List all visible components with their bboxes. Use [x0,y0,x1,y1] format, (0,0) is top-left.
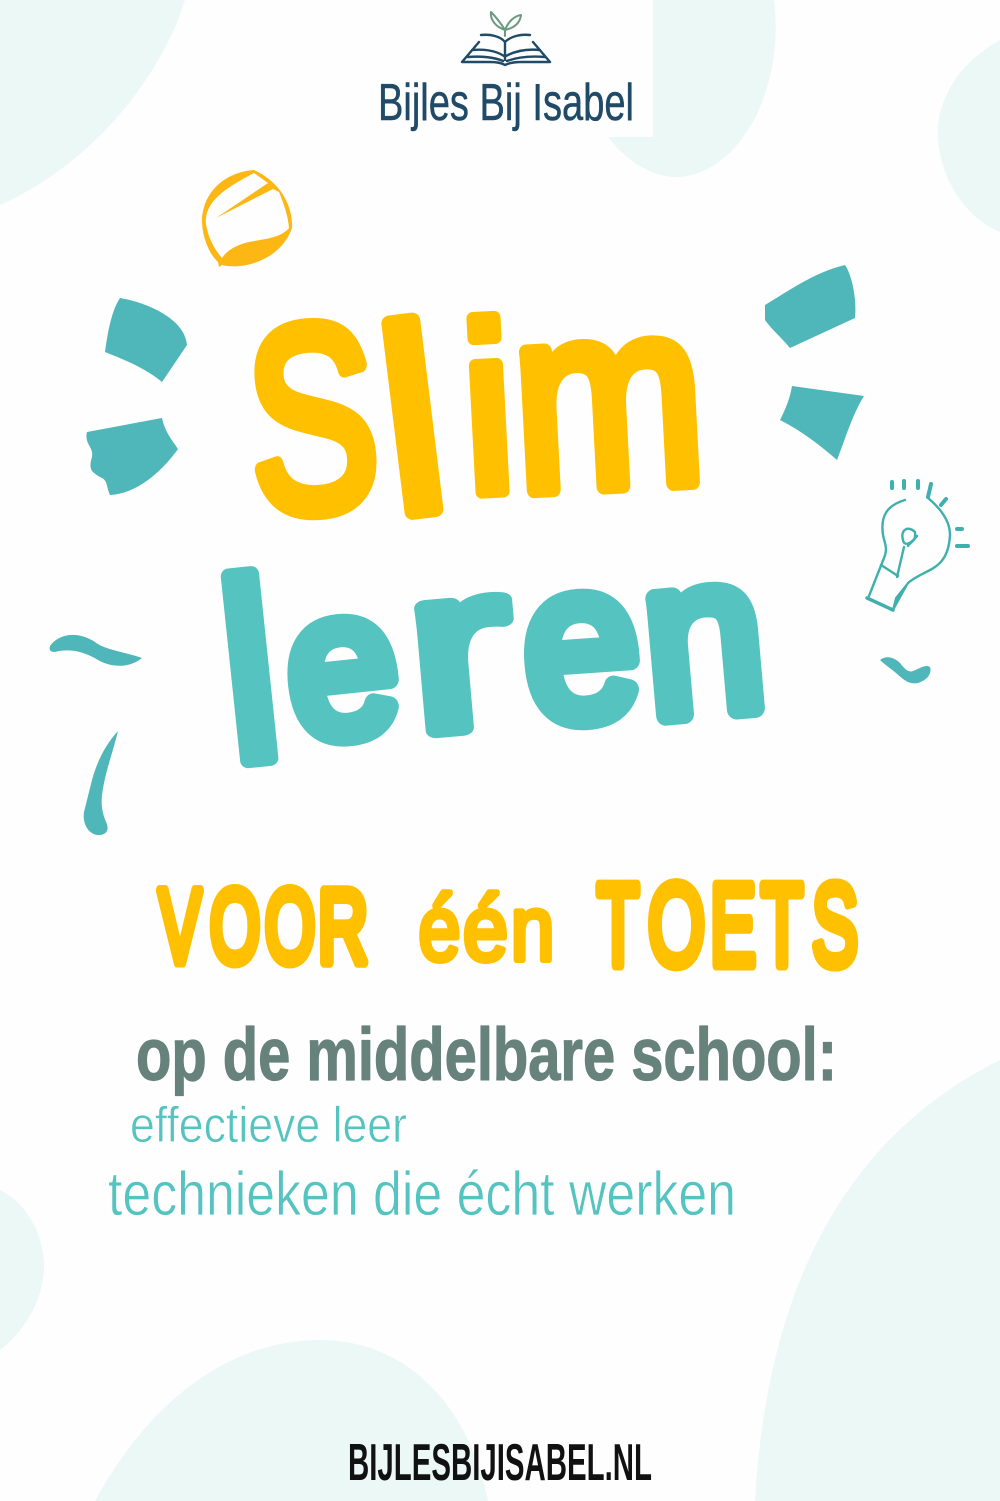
icon: book with sprout [462,12,550,65]
title: leren: e [515,515,647,770]
subtitle: voor een toets: R [318,869,368,985]
website url: BIJLESBIJISABEL.NL [348,1434,652,1492]
logo [350,0,653,137]
subtitle: voor een toets: V [159,869,201,985]
title: Slim: S [238,268,387,570]
icon: yellow circle doodle [202,170,292,267]
title: leren: e [275,543,408,784]
title: Slim: m [506,245,711,546]
title: leren: n [634,507,773,765]
subtitle: voor een toets [159,860,858,990]
decorative squiggle: lower left [84,731,118,835]
decorative shape: upper left teal [105,298,187,382]
text: technieken die echt werken: technieken die écht werken [108,1160,736,1229]
title: leren: l [207,527,293,817]
subtitle: voor een toets: S [812,860,858,990]
title: Slim: l [366,272,460,570]
subtitle: voor een toets: T [761,860,803,990]
title: leren [207,507,773,817]
decorative shape: lower right teal [780,386,864,460]
subtitle: voor een toets: O [648,860,705,990]
icon: lightbulb [867,481,968,610]
decorative squiggle: right [880,657,930,683]
subtitle: voor een toets: é [418,878,460,980]
subtitle: voor een toets: O [210,869,260,985]
subtitle: voor een toets: T [597,860,639,990]
decorative shape: lower left teal [86,418,178,495]
decorative squiggle: left [50,635,142,666]
subtitle: voor een toets: é [463,878,508,980]
logo wordmark: Bijles Bij Isabel [378,74,634,132]
title: leren: r [397,514,522,781]
title: Slim: i [455,274,522,544]
title: Slim [238,245,711,570]
subtitle: voor een toets: O [265,869,315,985]
text: effectieve leer: effectieve leer [130,1097,407,1153]
decorative shape: upper right teal [765,265,855,348]
subtitle: voor een toets: n [511,878,554,980]
subtitle: voor een toets: E [710,860,756,990]
